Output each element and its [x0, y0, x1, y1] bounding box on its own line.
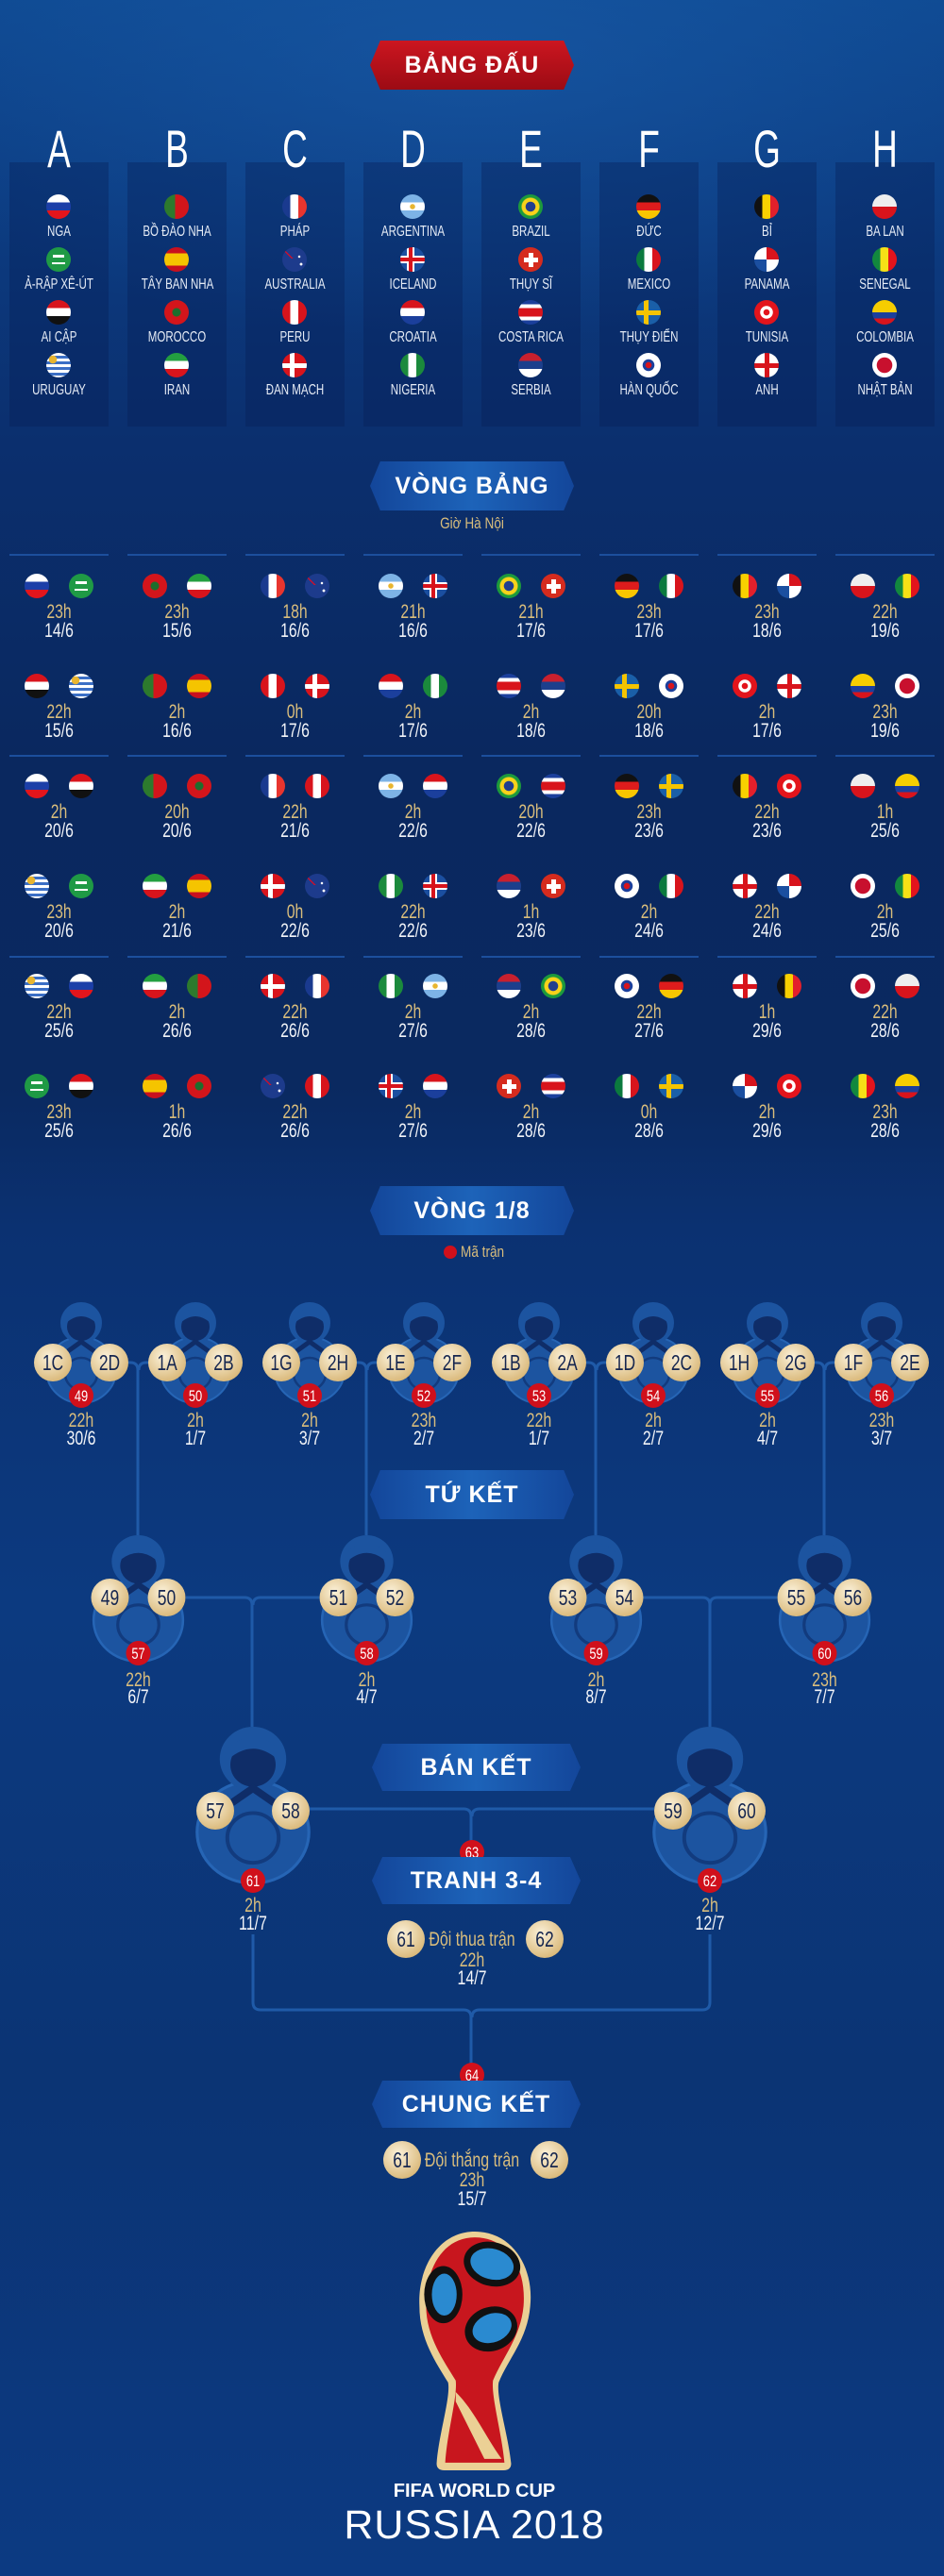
match number labels: 56 [875, 1387, 888, 1406]
match row 6: 26/6 [280, 1120, 310, 1142]
match row 5 [25, 974, 919, 1042]
knockout kickoff times: 2h [759, 1409, 776, 1431]
knockout dates: 1/7 [185, 1427, 206, 1449]
match row 5: 29/6 [752, 1020, 782, 1042]
match row 1: 17/6 [516, 620, 546, 642]
match row 5: 26/6 [280, 1020, 310, 1042]
panel: group B [127, 119, 227, 427]
match number labels: 63 [465, 1844, 479, 1863]
match row 5: 26/6 [162, 1020, 192, 1042]
match row 5: 22h [282, 1001, 308, 1023]
panel: group A [9, 119, 109, 427]
panel: group B: IRAN [164, 382, 190, 398]
panel: group E: COSTA RICA [498, 329, 564, 345]
panel: group E: E [519, 119, 543, 178]
knockout dates: 30/6 [66, 1427, 96, 1449]
match row 6: 23h [872, 1101, 898, 1123]
match row 1: 23h [754, 601, 780, 623]
team slot labels: 2A [557, 1352, 578, 1376]
match number badges [69, 1383, 894, 2087]
team slot labels: 54 [615, 1587, 633, 1611]
knockout dates: 4/7 [356, 1685, 378, 1708]
team slot labels: 1G [270, 1352, 293, 1376]
match row 5: 1h [759, 1001, 775, 1023]
match row 6: 26/6 [162, 1120, 192, 1142]
match row 5: 2h [405, 1001, 421, 1023]
panel: group H: COLOMBIA [856, 329, 914, 345]
match row 4: 22h [754, 901, 780, 923]
heading banner: TRANH 3-4: TRANH 3-4 [411, 1867, 542, 1894]
match number labels: 57 [131, 1645, 145, 1664]
match row 2: 22h [46, 701, 72, 723]
match row 2: 2h [405, 701, 421, 723]
match row 1: 21h [400, 601, 426, 623]
team slot labels: 1A [157, 1352, 177, 1376]
panel: group A: AI CẬP [42, 329, 76, 345]
knockout kickoff times: 2h [701, 1894, 718, 1916]
match row 6: 29/6 [752, 1120, 782, 1142]
match row 6: 1h [169, 1101, 185, 1123]
panel: group A: NGA [47, 224, 71, 240]
match row 1: 19/6 [870, 620, 900, 642]
match row 6: 28/6 [516, 1120, 546, 1142]
heading banner: VÒNG 1/8 [370, 1186, 574, 1235]
knockout kickoff times: 23h [812, 1668, 837, 1691]
panel: group G: BỈ [762, 224, 772, 240]
team slot labels: 2F [443, 1352, 462, 1376]
logo: FIFA World Cup trophy [419, 2232, 531, 2470]
team slot labels: 50 [158, 1587, 176, 1611]
knockout kickoff times: Đội thắng trận [425, 2149, 519, 2171]
knockout kickoff times: 23h [869, 1409, 894, 1431]
knockout kickoff times: 22h [69, 1409, 93, 1431]
team slot labels: 1B [500, 1352, 521, 1376]
match row 6: 2h [759, 1101, 775, 1123]
match row 1: 16/6 [280, 620, 310, 642]
knockout dates: 1/7 [529, 1427, 549, 1449]
match row 5: 28/6 [870, 1020, 900, 1042]
panel: group E: SERBIA [511, 382, 551, 398]
match row 2: 19/6 [870, 720, 900, 742]
panel: group B: B [165, 119, 189, 178]
team slot labels: 2C [671, 1352, 692, 1376]
match row 2: 2h [523, 701, 539, 723]
heading banner: BÁN KẾT [372, 1744, 581, 1791]
match number labels: 50 [189, 1387, 202, 1406]
panel: group B: BỒ ĐÀO NHA [143, 224, 211, 240]
knockout dates: 2/7 [643, 1427, 664, 1449]
match row 2 [25, 674, 919, 742]
quarter-final dolls [93, 1535, 869, 1662]
panel: group F: F [638, 119, 660, 178]
match row 3: 20h [164, 801, 190, 823]
panel: group C: PERU [279, 329, 310, 345]
subtitle: Giờ Hà Nội: Giờ Hà Nội [440, 514, 504, 532]
match row 4: 1h [523, 901, 539, 923]
knockout kickoff times: 23h [412, 1409, 436, 1431]
knockout kickoff times: 2h [588, 1668, 604, 1691]
knockout dates: 2/7 [413, 1427, 434, 1449]
team slot labels: 58 [281, 1800, 300, 1824]
match row 6: 0h [641, 1101, 657, 1123]
match row 2: 18/6 [634, 720, 664, 742]
match row 2: 16/6 [162, 720, 192, 742]
panel: group A: URUGUAY [32, 382, 86, 398]
match row 3: 22h [282, 801, 308, 823]
match row 3: 2h [405, 801, 421, 823]
match row 2: 2h [759, 701, 775, 723]
match row 4: 2h [641, 901, 657, 923]
match row 4 [25, 874, 919, 942]
match row 6: 2h [405, 1101, 421, 1123]
match number labels: 61 [246, 1872, 260, 1891]
team slot labels: 61 [396, 1929, 415, 1952]
match row 4: 22/6 [398, 920, 428, 942]
match number labels: 58 [360, 1645, 374, 1664]
panel: group D: ARGENTINA [381, 224, 445, 240]
heading banner: VÒNG BẢNG [370, 461, 574, 510]
knockout dates: 7/7 [814, 1685, 835, 1708]
panel: group D: CROATIA [389, 329, 437, 345]
match row 2: 17/6 [752, 720, 782, 742]
team slot labels: 1H [729, 1352, 750, 1376]
knockout dates: 4/7 [757, 1427, 778, 1449]
panel: group F: MEXICO [628, 276, 670, 293]
team slot labels: 61 [393, 2149, 412, 2173]
match row 4: 22h [400, 901, 426, 923]
team slot labels: 1D [615, 1352, 635, 1376]
match row 4: 24/6 [634, 920, 664, 942]
panel: group D [363, 119, 463, 427]
team slot labels: 1C [42, 1352, 63, 1376]
heading banner: CHUNG KẾT [372, 2081, 581, 2128]
match row 3: 23/6 [752, 820, 782, 842]
match row 2: 17/6 [398, 720, 428, 742]
knockout kickoff times: 22h [126, 1668, 151, 1691]
title banner: BẢNG ĐẤU [370, 41, 574, 90]
panel: group D: NIGERIA [391, 382, 435, 398]
panel: group E [481, 119, 581, 427]
team slot labels: 2G [784, 1352, 807, 1376]
knockout dates: 12/7 [695, 1912, 725, 1934]
match row 3: 20h [518, 801, 544, 823]
match row 3: 22/6 [398, 820, 428, 842]
team slot labels: 57 [206, 1800, 225, 1824]
match row 3: 22/6 [516, 820, 546, 842]
match row 3: 1h [877, 801, 893, 823]
team slot labels: 52 [386, 1587, 404, 1611]
match row 6 [25, 1074, 919, 1142]
match row 2: 0h [287, 701, 303, 723]
match row 1: 14/6 [44, 620, 74, 642]
match number labels: 52 [417, 1387, 430, 1406]
match row 1: 21h [518, 601, 544, 623]
heading banner: TỨ KẾT [370, 1470, 574, 1519]
match row 1: 15/6 [162, 620, 192, 642]
panel: group C [245, 119, 345, 427]
match row 2: 18/6 [516, 720, 546, 742]
round of 16 dolls [46, 1302, 917, 1403]
knockout kickoff times: 2h [359, 1668, 375, 1691]
team slot circles [34, 1344, 929, 2179]
knockout dates: 3/7 [299, 1427, 320, 1449]
match row 6: 28/6 [634, 1120, 664, 1142]
panel: group C: C [282, 119, 308, 178]
panel: group G: TUNISIA [746, 329, 788, 345]
match row 4: 24/6 [752, 920, 782, 942]
team slot labels: 62 [535, 1929, 554, 1952]
match row 3: 23h [636, 801, 662, 823]
panel: group E: THỤY SĨ [510, 276, 552, 293]
panel: group A: Ả-RẬP XÊ-ÚT [25, 276, 93, 293]
heading banner: TỨ KẾT: TỨ KẾT [426, 1481, 518, 1508]
match row 4: 22/6 [280, 920, 310, 942]
match row 6: 22h [282, 1101, 308, 1123]
logo text: RUSSIA 2018: RUSSIA 2018 [344, 2502, 605, 2548]
knockout dates: 3/7 [871, 1427, 892, 1449]
match number labels: 55 [761, 1387, 774, 1406]
team slot labels: 53 [559, 1587, 577, 1611]
match row 5: 2h [169, 1001, 185, 1023]
match row 5: 22h [872, 1001, 898, 1023]
semi-final dolls [197, 1727, 766, 1883]
match row 3: 2h [51, 801, 67, 823]
match row 2: 23h [872, 701, 898, 723]
team slot labels: 1F [844, 1352, 863, 1376]
knockout kickoff times [69, 1409, 894, 2191]
separator lines for match days [9, 554, 935, 958]
panel: group F [599, 119, 699, 427]
match row 4: 21/6 [162, 920, 192, 942]
match row 2: 20h [636, 701, 662, 723]
panel: group H: BA LAN [866, 224, 904, 240]
match number labels: 59 [589, 1645, 603, 1664]
team slot labels: 55 [787, 1587, 805, 1611]
heading banner: CHUNG KẾT: CHUNG KẾT [402, 2091, 550, 2117]
panel: group G [717, 119, 817, 427]
knockout dates: 15/7 [457, 2187, 487, 2210]
match row 5: 25/6 [44, 1020, 74, 1042]
group stage match grid [25, 574, 919, 1142]
panel: group C: PHÁP [280, 224, 310, 240]
team slot labels: 62 [540, 2149, 559, 2173]
match row 5: 2h [523, 1001, 539, 1023]
panel: group G: PANAMA [745, 276, 789, 293]
match row 5: 27/6 [398, 1020, 428, 1042]
match row 6: 27/6 [398, 1120, 428, 1142]
team slot labels: 56 [844, 1587, 862, 1611]
team slot labels: 2D [99, 1352, 120, 1376]
knockout kickoff times: 2h [301, 1409, 318, 1431]
match row 5: 22h [46, 1001, 72, 1023]
match number labels: 51 [303, 1387, 316, 1406]
match row 4: 23/6 [516, 920, 546, 942]
knockout kickoff times: 22h [460, 1949, 484, 1971]
match row 1: 17/6 [634, 620, 664, 642]
panel: group G: ANH [755, 382, 779, 398]
match row 1: 22h [872, 601, 898, 623]
match row 2: 15/6 [44, 720, 74, 742]
match row 6: 23h [46, 1101, 72, 1123]
panel: group F: ĐỨC [636, 224, 662, 240]
knockout kickoff times: 23h [460, 2168, 484, 2191]
match row 6: 28/6 [870, 1120, 900, 1142]
match row 1: 23h [164, 601, 190, 623]
match row 5: 28/6 [516, 1020, 546, 1042]
panel: group C: ĐAN MẠCH [266, 382, 324, 398]
match row 1: 23h [636, 601, 662, 623]
team slot labels: 59 [664, 1800, 683, 1824]
match row 2: 17/6 [280, 720, 310, 742]
match row 3: 20/6 [162, 820, 192, 842]
panel: group H: H [872, 119, 898, 178]
match row 3: 22h [754, 801, 780, 823]
knockout dates: 6/7 [127, 1685, 149, 1708]
match row 4: 0h [287, 901, 303, 923]
knockout kickoff times: 2h [187, 1409, 204, 1431]
heading banner: TRANH 3-4 [372, 1857, 581, 1904]
team slot labels [42, 1352, 920, 2173]
heading banner: VÒNG 1/8: VÒNG 1/8 [413, 1197, 531, 1224]
match row 2: 2h [169, 701, 185, 723]
match row 4: 25/6 [870, 920, 900, 942]
knockout kickoff times: Đội thua trận [429, 1928, 515, 1950]
panel: group F: THỤY ĐIỂN [620, 329, 678, 345]
match row 3 [25, 774, 919, 842]
match row 5: 27/6 [634, 1020, 664, 1042]
panel: group B: TÂY BAN NHA [142, 276, 213, 293]
panel: group H: NHẬT BẢN [857, 382, 913, 398]
legend: match code: Mã trận [461, 1243, 504, 1261]
panel: group E: BRAZIL [512, 224, 550, 240]
panel: group C: AUSTRALIA [264, 276, 326, 293]
match row 3: 20/6 [44, 820, 74, 842]
panel: group D: D [400, 119, 426, 178]
team slot labels: 2H [328, 1352, 348, 1376]
team slot labels: 51 [329, 1587, 347, 1611]
panel: group H: SENEGAL [859, 276, 911, 293]
knockout kickoff times: 2h [244, 1894, 261, 1916]
match row 6: 25/6 [44, 1120, 74, 1142]
team slot labels: 49 [101, 1587, 119, 1611]
knockout dates: 11/7 [239, 1912, 267, 1934]
panel: group G: G [753, 119, 781, 178]
team slot labels: 2B [213, 1352, 234, 1376]
heading banner: VÒNG BẢNG: VÒNG BẢNG [395, 473, 549, 499]
match number labels: 64 [465, 2066, 479, 2085]
match row 1: 18/6 [752, 620, 782, 642]
match number labels: 60 [818, 1645, 832, 1664]
team slot labels: 1E [385, 1352, 406, 1376]
knockout kickoff times: 22h [527, 1409, 551, 1431]
match number labels [75, 1387, 888, 2085]
match row 4: 2h [169, 901, 185, 923]
match number labels: 62 [703, 1872, 716, 1891]
panel: group A: A [47, 119, 71, 178]
team slot labels: 2E [900, 1352, 920, 1376]
knockout dates: 14/7 [457, 1966, 487, 1989]
match number labels: 54 [647, 1387, 660, 1406]
match row 3: 25/6 [870, 820, 900, 842]
match number labels: 49 [75, 1387, 88, 1406]
match row 1 [25, 574, 919, 642]
panel: group D: ICELAND [390, 276, 436, 293]
match row 3: 21/6 [280, 820, 310, 842]
panel: group B: MOROCCO [148, 329, 206, 345]
match row 4: 23h [46, 901, 72, 923]
panel: group F: HÀN QUỐC [619, 382, 679, 398]
match row 1: 18h [282, 601, 308, 623]
knockout kickoff times: 2h [645, 1409, 662, 1431]
heading banner: BÁN KẾT: BÁN KẾT [420, 1754, 532, 1781]
panel: group H [835, 119, 935, 427]
logo text: FIFA WORLD CUP: FIFA WORLD CUP [394, 2481, 555, 2501]
match number labels: 53 [532, 1387, 546, 1406]
team slot labels: 60 [737, 1800, 756, 1824]
match row 1: 16/6 [398, 620, 428, 642]
knockout dates [66, 1427, 892, 2210]
title banner: BẢNG ĐẤU: BẢNG ĐẤU [405, 52, 539, 78]
match row 3: 23/6 [634, 820, 664, 842]
match row 6: 2h [523, 1101, 539, 1123]
match row 4: 20/6 [44, 920, 74, 942]
knockout dates: 8/7 [585, 1685, 607, 1708]
match row 4: 2h [877, 901, 893, 923]
match row 1: 23h [46, 601, 72, 623]
bracket connector lines [128, 1363, 834, 2066]
match row 5: 22h [636, 1001, 662, 1023]
